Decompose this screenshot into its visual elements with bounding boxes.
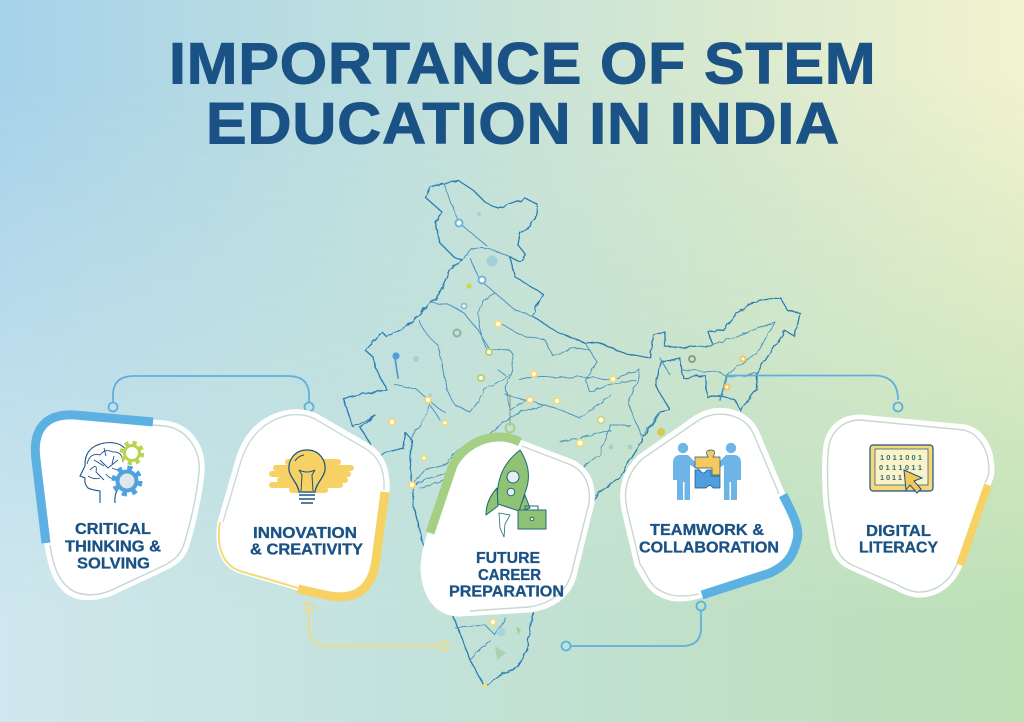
title: IMPORTANCE OF STEM (169, 31, 876, 96)
label: digital literacy: LITERACY (859, 540, 939, 556)
connector: teamwork to map (562, 602, 706, 650)
icon: tablet with binary and cursor: 1 0 1 1 (880, 473, 902, 482)
card: future career (423, 437, 592, 614)
label: teamwork: COLLABORATION (639, 540, 779, 556)
map outline (343, 181, 800, 687)
state borders and rivers (395, 183, 775, 660)
icon: tablet with binary and cursor: 1 0 1 1 0 0 1 (880, 453, 922, 462)
card: teamwork (623, 410, 798, 599)
accent arc (960, 485, 988, 565)
icon: rocket and briefcase (486, 450, 546, 537)
title: EDUCATION IN INDIA (206, 91, 839, 156)
label: digital literacy (859, 523, 939, 556)
icon: blue gear (114, 468, 140, 494)
connector: critical thinking to innovation (108, 376, 314, 412)
label: innovation: INNOVATION (253, 525, 357, 542)
icon: brain and gears (80, 443, 142, 503)
label: critical thinking: THINKING & (65, 538, 161, 556)
label: critical thinking: CRITICAL (75, 521, 151, 538)
map city markers (389, 220, 746, 688)
label: future career: PREPARATION (449, 584, 564, 600)
label: digital literacy: DIGITAL (866, 523, 931, 540)
connector: future career to map (506, 424, 514, 432)
label: future career: CAREER (478, 567, 541, 584)
accent arc (298, 492, 385, 597)
accent arc (35, 415, 153, 543)
icon: light bulb on brush stroke (272, 450, 351, 503)
label: innovation: & CREATIVITY (250, 542, 364, 558)
accent arc (430, 437, 520, 533)
icon: two people with puzzle (673, 443, 741, 500)
label: future career: FUTURE (476, 550, 540, 567)
map of India (343, 181, 800, 688)
connector: digital literacy to map (728, 376, 902, 412)
label: critical thinking: SOLVING (77, 556, 150, 572)
connector: innovation to map (304, 602, 448, 650)
icon: green gear (122, 443, 142, 463)
icon: tablet with binary and cursor (870, 445, 933, 493)
card: innovation (219, 412, 387, 598)
label: critical thinking (65, 521, 161, 572)
card: digital literacy (824, 417, 992, 595)
label: future career (449, 550, 564, 600)
label: teamwork (639, 522, 779, 556)
accent arc (702, 495, 798, 595)
icon: tablet with binary and cursor: 0 1 1 1 0 1 1 (879, 463, 922, 472)
card: critical thinking (35, 415, 202, 598)
label: innovation (250, 525, 364, 558)
title (169, 31, 876, 156)
label: teamwork: TEAMWORK & (650, 522, 764, 539)
